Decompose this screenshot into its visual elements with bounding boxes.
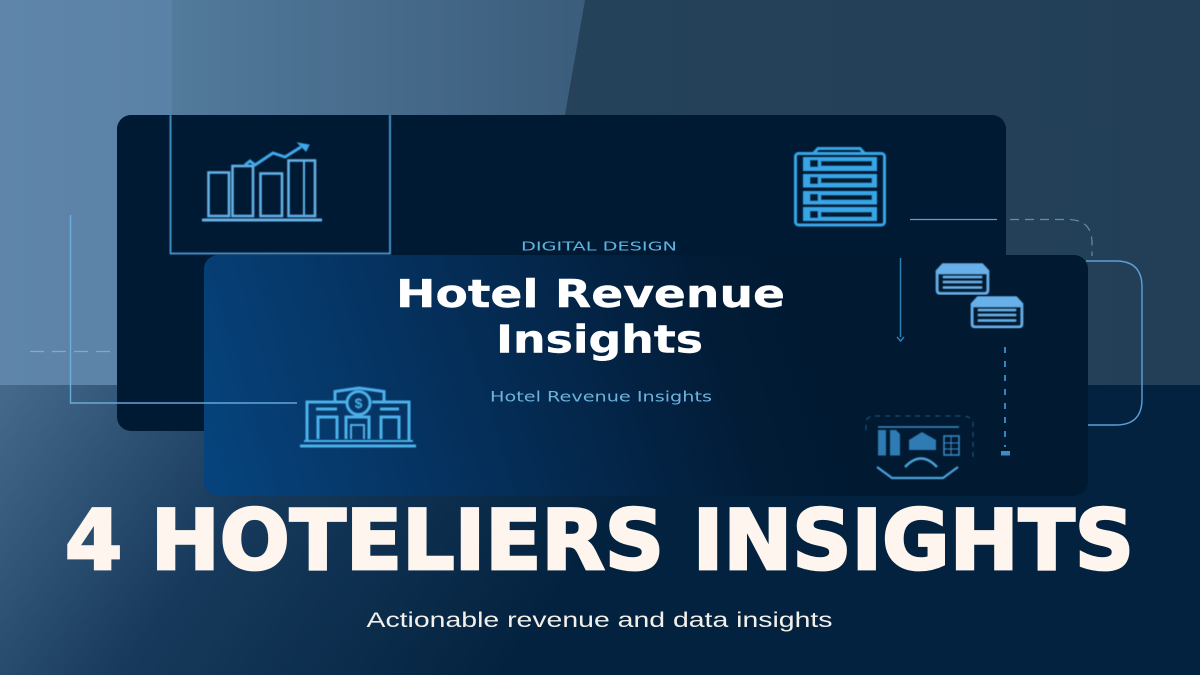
icon: calendar card two <box>972 297 1022 327</box>
connector: dashed vertical with end block <box>1001 347 1010 456</box>
icon: clipboard checklist <box>796 148 884 225</box>
connector: left dashed line <box>30 350 117 352</box>
panel: back card <box>117 115 1006 431</box>
heading: hotel revenue insights: Insights <box>496 318 703 362</box>
heading: digital design: DIGITAL DESIGN <box>521 238 677 254</box>
heading: hotel revenue insights: Hotel Revenue <box>396 272 785 316</box>
connector: left elbow line <box>70 215 297 403</box>
panel: front card <box>204 255 1088 496</box>
title: 4 HOTELIERS INSIGHTS <box>65 492 1134 589</box>
connector: right rounded bracket <box>1086 261 1142 425</box>
subtitle: Actionable revenue and data insights <box>366 609 832 632</box>
subheading: hotel revenue insights: Hotel Revenue Insights <box>490 390 712 406</box>
icon: bar chart in frame <box>170 115 390 254</box>
icon: calendar card one <box>937 264 988 294</box>
connector: vertical arrow <box>897 258 904 341</box>
icon: city skyline with tray <box>866 416 973 478</box>
connector: horizontal line under clipboard <box>910 218 997 220</box>
icon: hotel building with dollar sign <box>300 388 416 446</box>
heading: hotel revenue insights <box>396 272 785 362</box>
connector: right dashed curve <box>1010 220 1092 256</box>
icon: hotel building with dollar sign: $ <box>355 395 363 411</box>
